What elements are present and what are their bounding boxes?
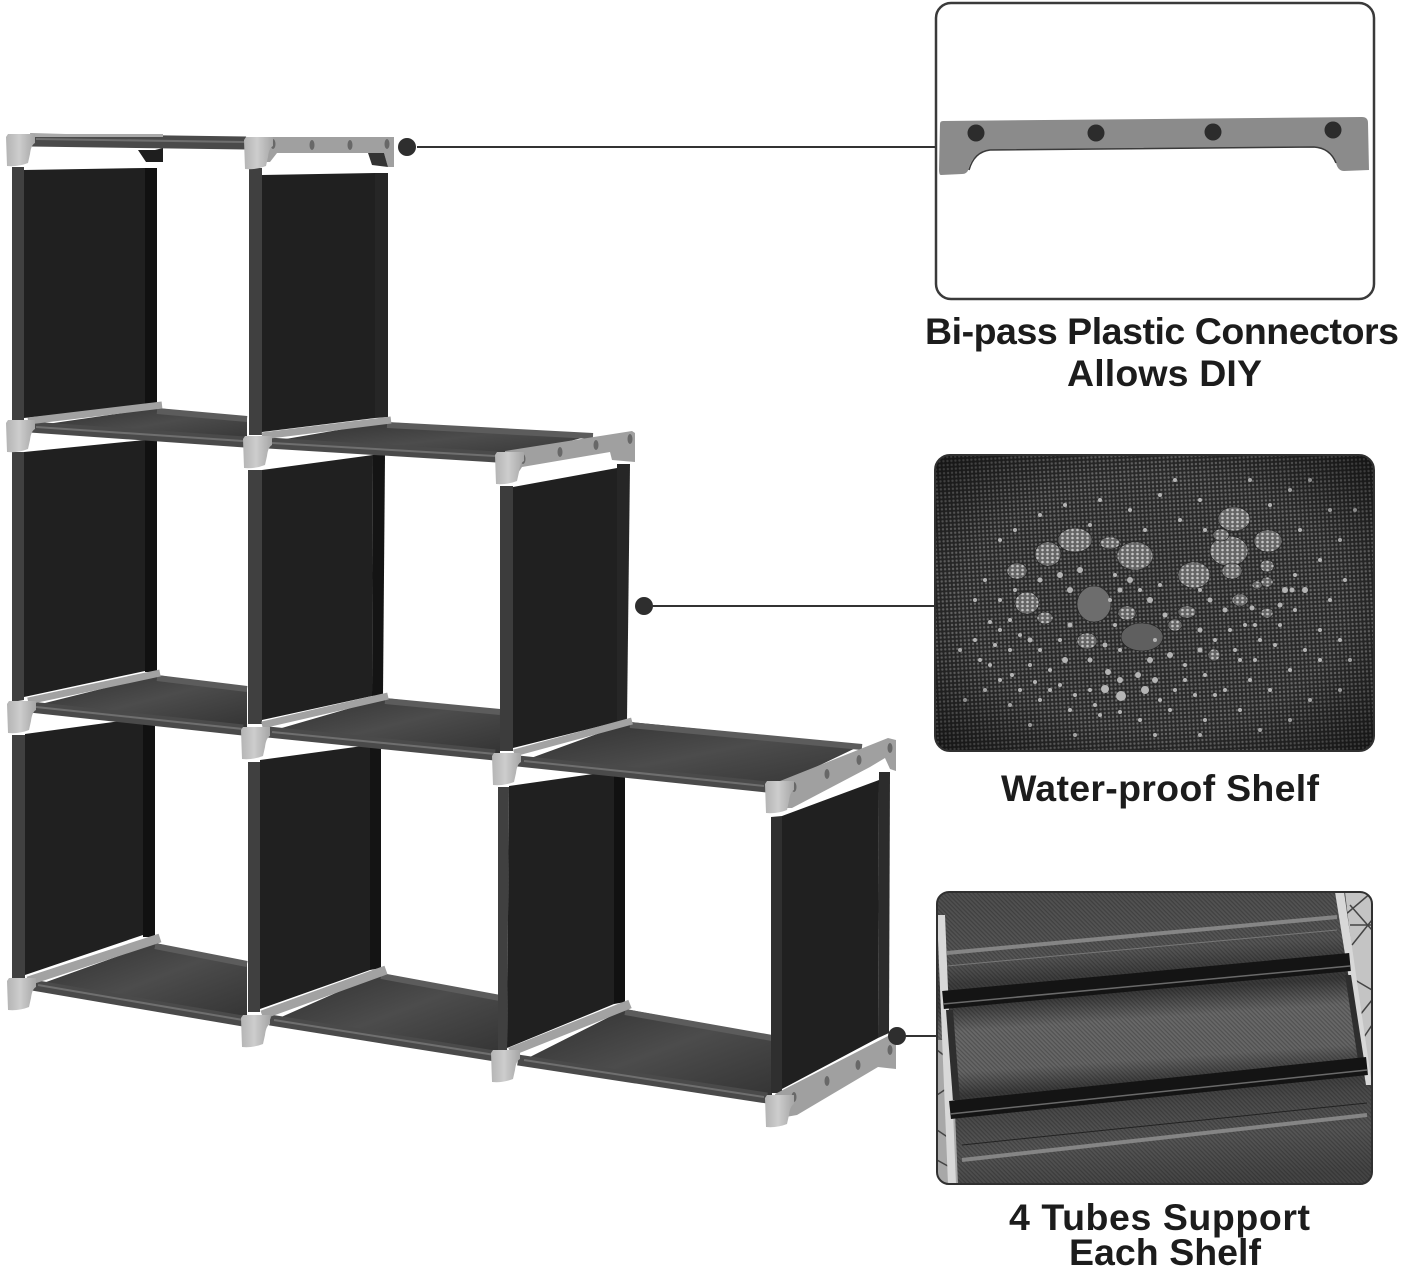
heading: connectors — [925, 310, 1399, 394]
heading: connectors: Bi-pass Plastic Connectors — [925, 310, 1399, 352]
icon: plastic connector — [939, 117, 1369, 175]
fabric seams — [947, 917, 1367, 1160]
heading: tubes: 4 Tubes Support — [1009, 1196, 1310, 1238]
panels: column two — [248, 168, 388, 1012]
panel: support tubes photo — [937, 892, 1372, 1184]
leader line: water-proof callout — [635, 597, 936, 615]
water droplets — [1007, 507, 1282, 661]
panels: column one — [12, 167, 157, 980]
heading: connectors: Allows DIY — [1067, 352, 1262, 394]
fabric texture — [937, 892, 1372, 1184]
panel: water-proof fabric photo — [935, 455, 1374, 751]
panel outline: water-proof photo — [935, 455, 1374, 751]
panel: plastic connector detail — [936, 3, 1374, 299]
front support rods — [30, 139, 767, 1098]
leader line: tubes callout — [888, 1027, 937, 1045]
white frame and lattice — [937, 892, 1372, 1184]
panels: column four — [771, 772, 890, 1093]
photo edge shading — [935, 455, 1374, 751]
panel outline: tubes photo — [937, 892, 1372, 1184]
heading: tubes — [1009, 1196, 1310, 1268]
shelves: surfaces and back edges — [33, 408, 862, 1102]
panels: column three — [498, 464, 630, 1052]
corner connectors — [6, 134, 794, 1127]
tiny water beads — [958, 478, 1357, 737]
leader line: connector callout — [398, 138, 936, 156]
connector bars with peg holes — [262, 137, 896, 1118]
storage shelf unit — [6, 134, 896, 1127]
heading: water-proof shelf: Water-proof Shelf — [1001, 767, 1320, 809]
support tubes — [943, 962, 1367, 1114]
side connector arms — [28, 134, 632, 1052]
